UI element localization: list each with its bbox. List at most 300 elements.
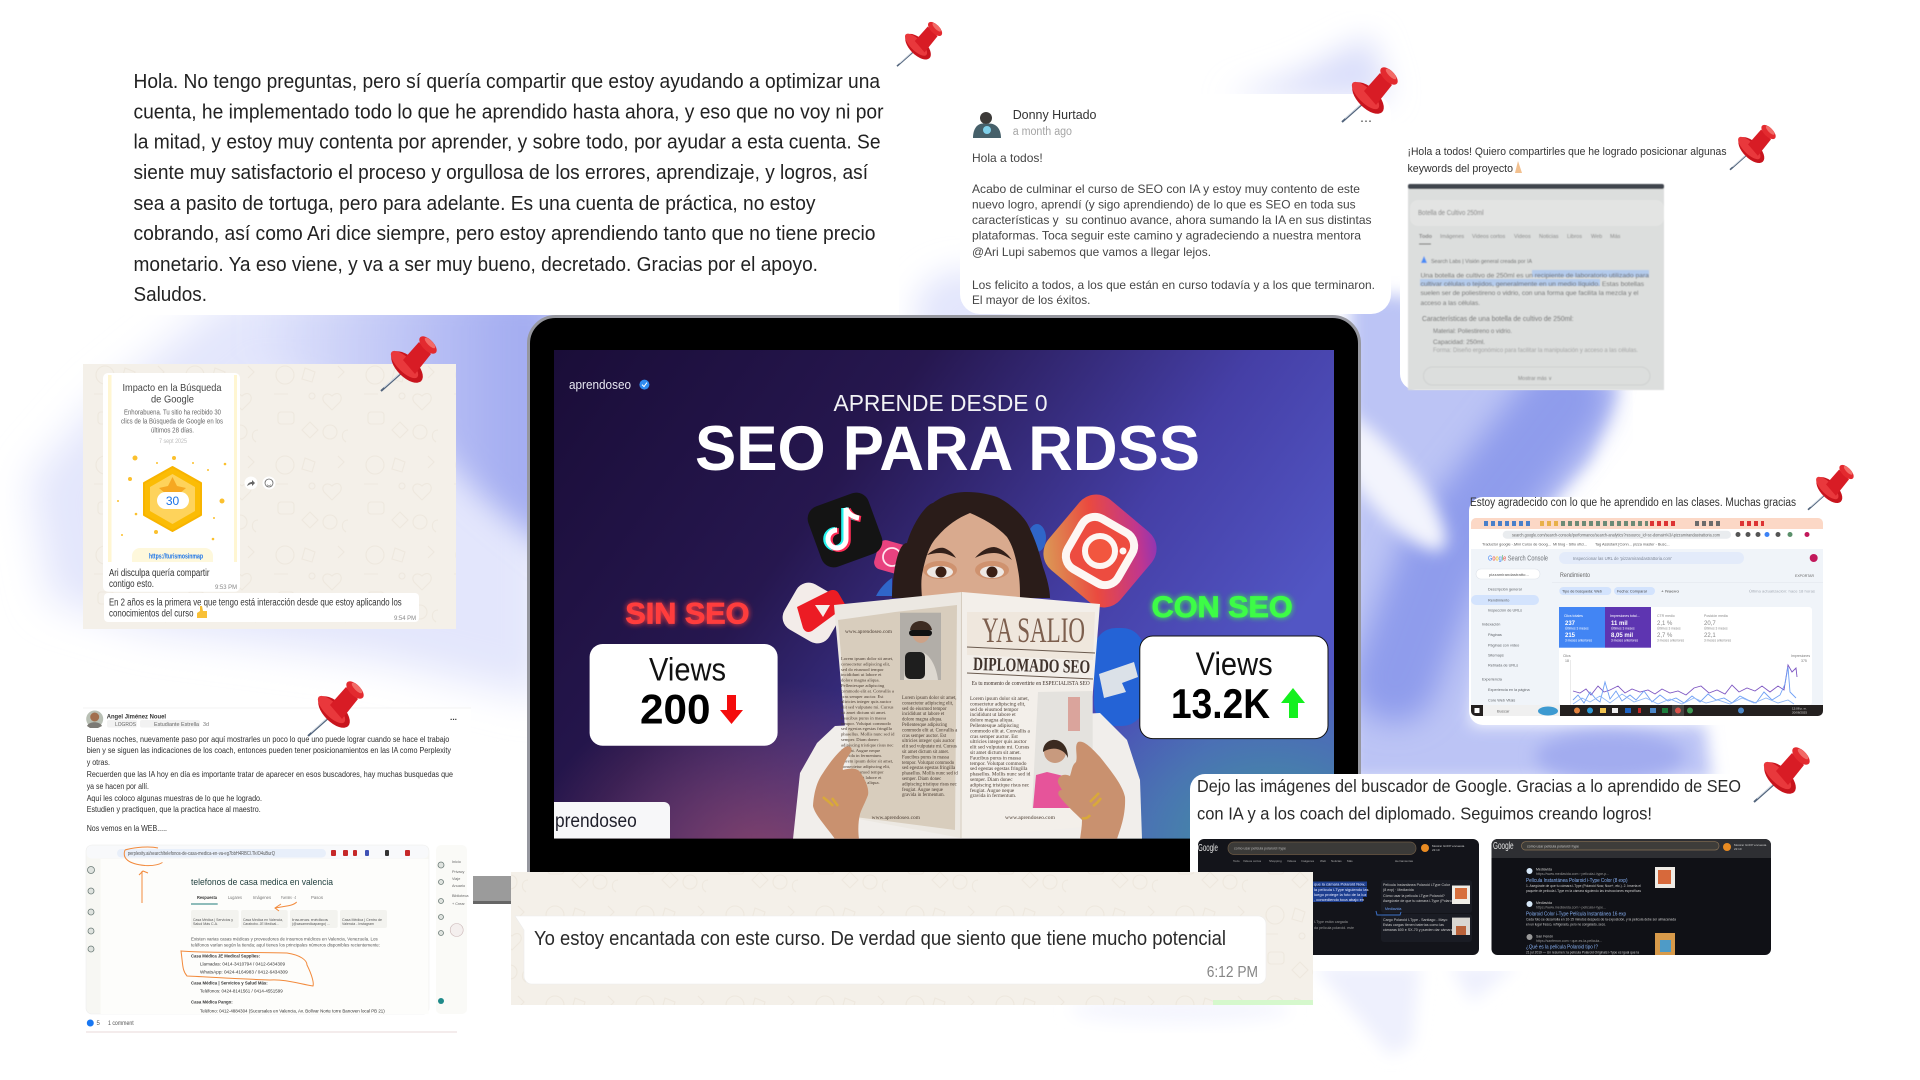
newspaper columns: commodo elit at. Convallis a: [970, 728, 1030, 734]
newspaper photo right: [1032, 691, 1093, 808]
sidebar menu: Descripción general: [1488, 588, 1522, 592]
badge card: Impacto en la Búsqueda: [122, 382, 222, 394]
post text: Hola a todos!: [972, 151, 1043, 165]
screenshot: Perplexity results: Imágenes: [253, 895, 272, 900]
performance metrics: 3 meses anteriores: [1565, 638, 1593, 642]
panel: keywords testimonial: ¡Hola a todos! Quiero compartirles que he logrado posicionar algunas: [1408, 146, 1727, 158]
second message bubble: [104, 593, 419, 622]
newspaper columns: phasellus. Mollis nunc sed id: [902, 772, 958, 777]
heading: [696, 395, 1198, 470]
message bubble: [515, 916, 1266, 984]
newspaper columns: tempor. Volutpat commodo: [841, 721, 892, 726]
icon: 30 clicks hexagon badge: 30: [166, 494, 179, 508]
screenshot: AI overview photo: suelen ser de poliestireno o vidrio, con una forma que facilita la mezcla y el: [1420, 291, 1638, 297]
screenshot: Google results, AI overview: Videos cortos: [1243, 859, 1262, 863]
screenshot: Google results, AI overview: Asegúrate de que tu cámara i-Type (Polaroid: [1383, 899, 1455, 903]
screenshot: Google results list: https://www.mediavida.com › pelicula-i-type-p...: [1536, 872, 1609, 876]
screenshot: Google results, AI overview: 22:10: [1432, 848, 1440, 852]
panel: Angel Jiménez community post: [83, 708, 471, 1038]
performance metrics: 20,7: [1704, 621, 1716, 627]
sidebar menu: Experiencia en la página: [1488, 688, 1530, 692]
logo tab: aprendoseo: prendoseo: [555, 811, 637, 832]
newspaper columns: semper. Diam donec: [902, 777, 941, 782]
screenshot: Google Search Console: Fecha: Comparar: [1617, 588, 1648, 594]
sidebar menu: Indexación: [1482, 622, 1500, 626]
line chart: clicks and impressions: [1563, 654, 1810, 705]
hands holding newspaper: [813, 742, 1125, 839]
sidebar menu: Core Web Vitals: [1488, 698, 1515, 702]
badge card: clics de la Búsqueda de Google en los: [121, 418, 223, 426]
panel: Google search results testimonial: Dejo las imágenes del buscador de Google. Gracias a lo aprendido de SEO: [1197, 776, 1741, 796]
post text: Estudien y practiquen, que la practica hace al maestro.: [87, 805, 261, 814]
sidebar menu: [1471, 588, 1539, 702]
panel: Donny Hurtado post: a month ago: [1013, 126, 1072, 138]
screenshot: AI overview photo: Videos cortos: [1472, 234, 1505, 240]
screenshot: Google Search Console: Última actualización: hace 18 horas: [1749, 588, 1815, 594]
screenshot: Google results, AI overview: Película Instantánea Polaroid i-Type Color: [1383, 883, 1451, 887]
performance metrics: Posición media: [1704, 614, 1728, 618]
annotations: orange hand-drawn marks: [124, 847, 313, 986]
screenshot: Google results list: ¿Qué es la película Polaroid tipo I?: [1526, 944, 1598, 950]
screenshot: AI overview photo: Imágenes: [1440, 234, 1464, 240]
link pill: https://turismosinmap: [149, 554, 203, 560]
author line: Estudiante Estrella: [154, 722, 200, 728]
newspaper columns: adipiscing tristique risus nec: [902, 782, 957, 787]
screenshot: Perplexity results: Llamadas: 0414-3410794 / 0412-6434309: [200, 961, 286, 966]
screenshot: Google results, AI overview: (8 exp) · Mediavida: [1383, 888, 1414, 892]
post text: y otras.: [87, 758, 110, 767]
screenshot: Google results, AI overview: I-Type están cargada: [1314, 920, 1348, 924]
screenshot: Google Search Console: Google Search Console: [1488, 554, 1548, 562]
screenshot: Perplexity results: Casa Médica Pango:: [191, 1000, 233, 1005]
screenshot: Google results, AI overview: Web: [1320, 859, 1326, 863]
newspaper columns: sed egestas egestas fringilla: [841, 726, 892, 731]
sidebar menu: Inspección de URLs: [1488, 608, 1522, 612]
newspaper columns: Faucibus purus in massa: [841, 715, 886, 720]
laptop frame: [527, 315, 1361, 872]
newspaper columns: gravida in fermentum.: [902, 793, 945, 798]
screenshot: AI overview photo: Web: [1591, 234, 1602, 240]
screenshot: Perplexity results: Lugares: [228, 895, 243, 900]
icon: 30 clicks hexagon badge: [117, 456, 226, 540]
avatar: [86, 710, 103, 728]
newspaper columns: incididunt ut labore et: [841, 672, 882, 677]
post text: características y su continuo avance, ahora sumando la IA en sus distintas: [972, 213, 1372, 227]
label: CON SEO: CON SEO: [1152, 591, 1293, 624]
screenshot: Perplexity results: Existen varias casas médicas y proveedores de insumos médicos en Valencia, Venezuela. Los: [191, 936, 379, 941]
reactions row: 5: [96, 1021, 100, 1027]
panel: Donny Hurtado post: Donny Hurtado: [1013, 108, 1097, 122]
post text: Los felicito a todos, a los que están en curso todavía y a los que terminaron.: [972, 278, 1375, 292]
newspaper columns: phasellus. Mollis nunc sed id: [841, 732, 895, 737]
line chart: clicks and impressions: Impresiones: [1791, 654, 1810, 658]
newspaper columns: Pellentesque adipiscing: [902, 723, 948, 728]
icon: Dribbble: [874, 540, 904, 574]
screenshot: Perplexity results: Casa Médica | Servicios y Salud Más:: [191, 981, 268, 986]
stat card: views with SEO: 13.2K: [1171, 680, 1270, 727]
screenshot: AI overview photo: Botella de Cultivo 250ml: [1418, 210, 1484, 217]
screenshot: Google results list: Google: [1493, 841, 1514, 852]
panel: main testimonial text: siente muy satisfactorio el proceso y orgullosa de los errores, aprendizaje, y logros, así: [134, 162, 868, 184]
performance metrics: 22,1: [1704, 633, 1716, 639]
screenshot: Perplexity results: [86, 845, 429, 1014]
panel: main testimonial text: sea a pasito de tortuga, pero para adelante. Es una cuenta de práctica, no estoy: [134, 193, 816, 215]
screenshot: second Perplexity thumbnail: Privacy: [452, 870, 465, 874]
newspaper columns: adipiscing tristique risus nec: [841, 742, 893, 747]
screenshot: Google results, AI overview: Todo: [1233, 859, 1240, 863]
Windows taskbar: [1471, 705, 1823, 716]
badge card: de Google: [151, 394, 194, 406]
stat card: views without SEO: Views: [649, 652, 726, 688]
screenshot: Google results list: San Fenón: [1536, 934, 1553, 938]
screenshot: Google results list: [1492, 839, 1771, 955]
newspaper headline: Es tu momento de convertirte en ESPECIALISTA SEO: [972, 681, 1090, 687]
screenshot: AI overview photo: Videos: [1514, 234, 1531, 240]
performance metrics: 2,1 %: [1657, 621, 1673, 627]
screenshot: Google results, AI overview: la película i-Type siguiendo las: [1314, 887, 1368, 892]
newspaper columns: Lorem ipsum dolor sit amet,: [841, 656, 893, 662]
icon: praying hands: [1515, 161, 1522, 173]
newspaper columns: sed do eiusmod tempor: [841, 769, 884, 774]
newspaper columns: consectetur adipiscing elit,: [902, 701, 953, 706]
screenshot: Google Search Console: Tag Assistant [Conn...: [1595, 542, 1632, 546]
post text: ya se hacen por allí.: [87, 782, 149, 791]
newspaper columns: tempor. Volutpat commodo: [902, 761, 955, 766]
label: SIN SEO: SIN SEO: [625, 598, 749, 631]
newspaper columns: incididunt ut labore et: [841, 775, 882, 780]
post text: El mayor de los éxitos.: [972, 293, 1090, 307]
screenshot: Perplexity results: Salud Más C.A.: [193, 922, 218, 926]
heading: SEO PARA RDSS: [695, 414, 1200, 484]
newspaper columns: elit sed vulputate mi. Cursus: [970, 745, 1029, 751]
newspaper columns: tempor. Volutpat commodo: [970, 761, 1027, 767]
newspaper columns: gravida in fermentum.: [970, 792, 1016, 799]
performance metrics: 2,7 %: [1657, 633, 1673, 639]
screenshot: Perplexity results: WhatsApp: 0424-4164983 / 0412-6434309: [200, 970, 288, 975]
newspaper columns: consectetur adipiscing elit,: [970, 701, 1025, 707]
newspaper columns: consectetur adipiscing elit,: [841, 661, 890, 667]
screenshot: Google results, AI overview: Cómo usar la película i-Type Polaroid?: [1383, 894, 1445, 898]
sidebar menu: Páginas con vídeo: [1488, 644, 1519, 648]
screenshot: Google Search Console: Traductor google -...: [1482, 542, 1516, 546]
newspaper columns: elit sed vulputate mi. Cursus: [902, 745, 957, 750]
screenshot: AI overview photo: Mostrar más ∨: [1518, 376, 1552, 382]
panel: main testimonial text: [0, 0, 899, 315]
screenshot: Google results, AI overview: Estas cargas tienen baterías como las: [1383, 923, 1444, 927]
sidebar menu: Páginas: [1488, 633, 1502, 637]
screenshot: AI overview photo: Capacidad: 250ml.: [1433, 340, 1485, 346]
reactions row: [86, 1020, 457, 1032]
newspaper columns: Pellentesque adipiscing: [841, 683, 885, 688]
newspaper columns: sed egestas egestas fringilla: [902, 766, 956, 771]
screenshot: Google results, AI overview: que la cámara Polaroid Now,: [1314, 882, 1365, 886]
line chart: clicks and impressions: 375: [1801, 659, 1807, 663]
icon: red push pin 4: [1730, 122, 1778, 170]
icon: Instagram: [1043, 494, 1157, 608]
icon: blue shapes behind the head: [876, 524, 1046, 596]
screenshot: Google results, AI overview: cámaras 600 e SX-70 y pueden dar cámaras: [1383, 928, 1455, 932]
screenshot: Perplexity results: telefonos de casa medica en valencia: [191, 877, 334, 888]
newspaper columns: cras semper auctor. Est: [970, 734, 1018, 740]
screenshot: second Perplexity thumbnail: + Crear: [452, 902, 466, 906]
screenshot: Google results list: https://sanfenon.com › que-es-la-pelicula...: [1536, 939, 1602, 943]
screenshot: Google results, AI overview: Más: [1347, 859, 1353, 863]
screenshot: Google results, AI overview: Mediavida: [1385, 907, 1401, 911]
newspaper headline: YA SALIO: [982, 610, 1085, 650]
newspaper columns: dolore magna aliqua.: [902, 718, 942, 723]
icon: green up arrow: [1281, 688, 1305, 718]
screenshot: Google Search Console: Mi blog - Sitio ofici...: [1553, 542, 1587, 546]
screenshot: AI overview photo: Forma: Diseño ergonómico para facilitar la manipulación y acceso a las células.: [1433, 348, 1638, 354]
newspaper: [834, 592, 1100, 838]
screenshot: Perplexity results: Teléfonos: 0424-8141561 / 0414-4551599: [200, 989, 283, 994]
message bubble: 6:12 PM: [1207, 964, 1258, 981]
badge card: 7 sept 2025: [159, 439, 188, 445]
newspaper columns: cras semper auctor. Est: [841, 694, 884, 699]
icon: red push pin 7: [1754, 744, 1813, 802]
newspaper: www.aprendoseo.com: [872, 816, 920, 821]
newspaper columns: ultricies integer quis auctor: [902, 739, 955, 744]
screenshot: Perplexity results: Respuesta: [197, 895, 217, 900]
newspaper columns: incididunt ut labore et: [902, 712, 945, 717]
screenshot: Google results list: https://www.mediavida.com › pelicula-i-type...: [1536, 906, 1606, 910]
screenshot: second Perplexity thumbnail: Viaje: [452, 877, 460, 881]
newspaper columns: Pellentesque adipiscing: [970, 723, 1019, 729]
newspaper columns: elit sed vulputate mi. Cursus: [841, 705, 894, 710]
screenshot: Google results list: Mediavida: [1536, 901, 1552, 905]
screenshot: Google Search Console: search.google.com/search-console/performance/search-analytics?resource_id=sc-domain%3Apizzamirandastrattoria.com: [1512, 532, 1720, 538]
screenshot: Google results list: 21 jul 2019 — Un resumen: la película Polaroid Originals i-Type es igual que la: [1526, 950, 1639, 954]
panel: Search Console testimonial: Estoy agradecido con lo que he aprendido en las clases. Muchas gracias: [1470, 497, 1796, 509]
screenshot: Google results list: Mostrar GCFP encuesta: [1734, 843, 1767, 847]
newspaper columns: dolore magna aliqua.: [841, 678, 880, 683]
line chart: clicks and impressions: 18: [1565, 659, 1569, 663]
sidebar menu: Experiencia: [1482, 678, 1503, 682]
post text: [87, 735, 453, 833]
icon: TikTok: [808, 492, 882, 568]
screenshot: Perplexity results: teléfonos varían según la tienda; aquí tienes los principales números disponibles recientemente:: [191, 943, 380, 948]
newspaper columns: dolore magna aliqua.: [841, 780, 880, 785]
logo tab: aprendoseo: [554, 802, 670, 839]
panel: main testimonial text: Saludos.: [134, 284, 207, 306]
link pill: [132, 548, 213, 562]
newspaper columns: sed do eiusmod tempor: [841, 667, 884, 672]
newspaper columns: Lorem ipsum dolor sit amet,: [841, 759, 893, 765]
newspaper columns: feugiat. Augue neque: [970, 787, 1015, 794]
newspaper columns: commodo elit at. Convallis a: [841, 688, 894, 693]
heading: APRENDE DESDE 0: [834, 390, 1048, 416]
newspaper columns: semper. Diam donec: [841, 737, 879, 742]
message bubble: Yo estoy encantada con este curso. De verdad que siento que tiene mucho potencial: [534, 927, 1226, 950]
decorative gray scrollbar block: [473, 876, 511, 904]
icon: red push pin 6: [308, 678, 367, 736]
screenshot: AI overview photo: cultivar células o tejidos, generalmente en un medio líquido. Estas botellas: [1420, 282, 1644, 288]
author line: LOGROS: [115, 722, 136, 728]
panel: Donny Hurtado post: ...: [1360, 114, 1372, 125]
Windows taskbar: 12:08 p. m.: [1792, 706, 1807, 710]
avatar: [973, 112, 1001, 138]
newspaper headline: DIPLOMADO SEO: [973, 654, 1090, 678]
screenshot: Perplexity results: perplexity.ai/search/telefonos-de-casa-medica-en-va-eg7bbH4RBCl.TkIO4uBurQ: [128, 851, 275, 857]
post text: Aquí les coloco algunas muestras de lo que he logrado.: [87, 794, 262, 803]
icon: forward and emoji buttons: [244, 476, 276, 490]
performance metrics: Últimos 3 meses: [1565, 626, 1589, 630]
post text: nuevo logro, aprendí (y sigo aprendiendo) de lo que es SEO en toda sus: [972, 198, 1356, 212]
newspaper columns: sed do eiusmod tempor: [902, 707, 947, 712]
stat card: views with SEO: Views: [1196, 646, 1273, 682]
post text: plataformas. Toca seguir este camino y agradeciendo a nuestra mentora: [972, 228, 1361, 242]
screenshot: second Perplexity thumbnail: Inicio: [452, 860, 461, 864]
performance metrics: 237: [1565, 621, 1576, 627]
screenshot: Perplexity results: Fuentes · 4: [281, 895, 296, 900]
post text: [972, 151, 1375, 307]
screenshot: Google Search Console: Rendimiento: [1560, 573, 1591, 579]
channel name: aprendoseo: [569, 378, 631, 392]
screenshot: Google Search Console: Inspeccionar las URL de 'pizzamirandastrattoria.com': [1573, 556, 1672, 561]
screenshot: Google results list: 22:10: [1734, 847, 1742, 851]
second message bubble: 9:54 PM: [394, 615, 416, 622]
screenshot: AI overview photo: [1408, 184, 1664, 390]
panel: main testimonial text: Hola. No tengo preguntas, pero sí quería compartir que estoy ayudando a optimizar una: [134, 71, 881, 93]
author line: [107, 713, 457, 728]
screenshot: Google results, AI overview: [1198, 839, 1479, 955]
performance metrics: 11 mil: [1611, 621, 1628, 627]
Windows taskbar: Buscar: [1497, 708, 1510, 714]
screenshot: Google results list: como usar pelicula polaroid i type: [1527, 844, 1580, 848]
sidebar menu: Rendimiento: [1488, 598, 1509, 602]
panel: Google search results testimonial: con IA y a los coach del diplomado. Seguimos creando logros!: [1197, 804, 1652, 824]
second message bubble: En 2 años es la primera ve que tengo está interacción desde que estoy aplicando los: [109, 598, 402, 608]
screenshot: Perplexity results: Carabobo. JE Medical...: [243, 922, 279, 926]
panel: Search Console testimonial: [1469, 497, 1920, 725]
panel: main testimonial text: la mitad, y estoy muy contenta por aprender, y sobre todo, por ayudar a esta cuenta. Se: [134, 132, 880, 154]
screenshot: Google results, AI overview: Herramientas: [1395, 859, 1414, 863]
badge card: últimos 28 días.: [151, 428, 194, 434]
thumbnail: SEO para RDSS video cover: [554, 350, 1334, 839]
screenshot: Google results, AI overview: da película polaroid. este: [1314, 926, 1354, 930]
newspaper columns: [841, 656, 1031, 799]
newspaper columns: commodo elit at. Convallis a: [902, 728, 958, 733]
post text: Recuerden que las IA hoy en día es importante tratar de aparecer en esos buscadores, hay muchas busquedas que: [87, 770, 453, 779]
newspaper columns: sit amet dictum sit amet.: [902, 750, 949, 755]
screenshot: Google Search Console: pizza master - Busc...: [1633, 542, 1670, 546]
screenshot: AI overview photo: Noticias: [1539, 234, 1559, 240]
screenshot: AI overview photo: acceso a las células.: [1420, 301, 1480, 307]
newspaper columns: Lorem ipsum dolor sit amet,: [970, 696, 1029, 702]
post text: Nos vemos en la WEB.....: [87, 824, 167, 833]
screenshot: AI overview photo: Todo: [1419, 234, 1433, 240]
badge card: Enhorabuena. Tu sitio ha recibido 30: [124, 410, 221, 416]
screenshot: Google Search Console: [1471, 518, 1823, 716]
newspaper columns: Lorem ipsum dolor sit amet,: [902, 696, 956, 701]
badge card: [103, 373, 240, 592]
screenshot: Perplexity results: Insumos médicos: [292, 918, 328, 922]
newspaper columns: cras semper auctor. Est: [902, 734, 947, 739]
screenshot: AI overview photo: Material: Poliestireno o vidrio.: [1433, 329, 1512, 335]
screenshot: Google results, AI overview: Google: [1198, 843, 1218, 854]
screenshot: Google Search Console: + Nuevo: [1661, 588, 1680, 594]
photo: woman behind newspaper: [892, 492, 1050, 598]
panel: keywords testimonial: [1400, 125, 1920, 390]
message text: Ari disculpa quería compartir: [109, 568, 210, 579]
newspaper columns: feugiat. Augue neque: [902, 788, 943, 793]
newspaper columns: Faucibus purus in massa: [902, 755, 950, 760]
newspaper columns: adipiscing tristique risus nec: [970, 782, 1030, 788]
screenshot: Google results list: Polaroid Color i-Type Película Instantánea 16 exp: [1526, 912, 1626, 918]
performance metrics: 8,05 mil: [1611, 633, 1633, 639]
author line: Angel Jiménez Nouel: [107, 713, 166, 720]
performance metrics: 3 meses anteriores: [1704, 638, 1732, 642]
newspaper columns: ultricies integer quis auctor: [970, 739, 1027, 745]
performance metrics: CTR medio: [1657, 614, 1675, 618]
screenshot: Google results, AI overview: Shopping: [1269, 859, 1282, 863]
icon: Facebook: [1094, 628, 1144, 726]
icon: red push pin 2: [381, 333, 440, 391]
post text: Buenas noches, nuevamente paso por aquí mostrarles un poco lo que uno puede lograr cuando se hace el trabajo: [87, 735, 450, 744]
newspaper: www.aprendoseo.com: [845, 630, 892, 635]
screenshot: Perplexity results: Pasos: [311, 895, 324, 900]
panel: WhatsApp Google impact message: 9:53 PM: [215, 584, 237, 591]
second message bubble: conocimientos del curso: [109, 608, 194, 620]
newspaper: www.aprendoseo.com: [1005, 816, 1055, 821]
screenshot: Perplexity results: Casa Médica JE Medical Supplies:: [191, 953, 261, 958]
screenshot: second Perplexity thumbnail: Biblioteca: [452, 894, 469, 898]
panel: WhatsApp Google impact message: contigo esto.: [109, 579, 154, 590]
screenshot: Google results list: en un lugar fresco, refrigerado, pero no congelado, seco.: [1526, 922, 1606, 926]
screenshot: second Perplexity thumbnail: Anuario: [452, 884, 465, 888]
newspaper columns: incididunt ut labore et: [970, 712, 1016, 718]
post text: @Ari Lupi sabemos que vamos a llegar lejos.: [972, 245, 1211, 259]
screenshot: Google results, AI overview: Mostrar GCFP encuesta: [1432, 844, 1465, 848]
screenshot: Google Search Console: Mini Curso de Goog...: [1514, 542, 1551, 546]
screenshot: Google Search Console: EXPORTAR: [1795, 573, 1814, 578]
screenshot: Perplexity results: Casa Médica | Centro de: [342, 918, 382, 922]
screenshot: Google results, AI overview: , concediendo toca abajo en: [1314, 897, 1364, 902]
performance metrics: Últimos 3 meses: [1611, 626, 1635, 630]
icon: red push pin 1: [897, 19, 945, 66]
screenshot: AI overview photo: Más: [1610, 234, 1621, 240]
stat card: views without SEO: 200: [640, 686, 710, 733]
screenshot: Perplexity results: Valencia - Instagram: [342, 922, 374, 926]
performance metrics: 215: [1565, 633, 1576, 639]
shirt: [793, 713, 1142, 839]
newspaper photo left: [900, 613, 941, 680]
screenshot: AI overview photo: Características de una botella de cultivo de 250ml:: [1422, 316, 1574, 323]
reactions row: 1 comment: [108, 1021, 134, 1027]
screenshot: Google results, AI overview: luego protege la foto de la luz: [1314, 892, 1366, 897]
panel: WhatsApp Google impact message: [83, 364, 456, 629]
icon: YouTube: [782, 582, 845, 644]
newspaper columns: sed egestas egestas fringilla: [970, 765, 1028, 772]
performance metrics: 3 meses anteriores: [1611, 638, 1639, 642]
screenshot: Google results, AI overview: Videos: [1287, 859, 1297, 863]
panel: main testimonial text: cuenta, he implementado todo lo que he aprendido hasta ahora, y eso que no voy ni por: [134, 102, 884, 124]
newspaper columns: dolore magna aliqua.: [970, 718, 1014, 724]
screenshot: AI overview photo: Una botella de cultivo de 250ml es un recipiente de laboratorio utilizado para: [1420, 274, 1650, 280]
performance metrics: Últimos 3 meses: [1704, 626, 1728, 630]
newspaper columns: sit amet dictum sit amet.: [841, 710, 886, 715]
author line: 3d: [203, 722, 209, 728]
screenshot: AI overview photo: Libros: [1567, 234, 1582, 240]
performance metrics: [1559, 607, 1812, 705]
newspaper columns: Faucibus purus in massa: [970, 755, 1022, 761]
panel: WhatsApp course message: [511, 872, 1313, 1005]
newspaper headline: [967, 618, 1095, 685]
performance metrics: Últimos 3 meses: [1657, 626, 1681, 630]
panel: keywords testimonial: keywords del proyecto: [1408, 163, 1513, 175]
performance metrics: Clics totales: [1564, 614, 1583, 618]
screenshot: Google results list: 1. Asegúrate de que tu cámara i-Type (Polaroid Now, Now+, etc.). 2. Inserta el: [1526, 884, 1641, 888]
